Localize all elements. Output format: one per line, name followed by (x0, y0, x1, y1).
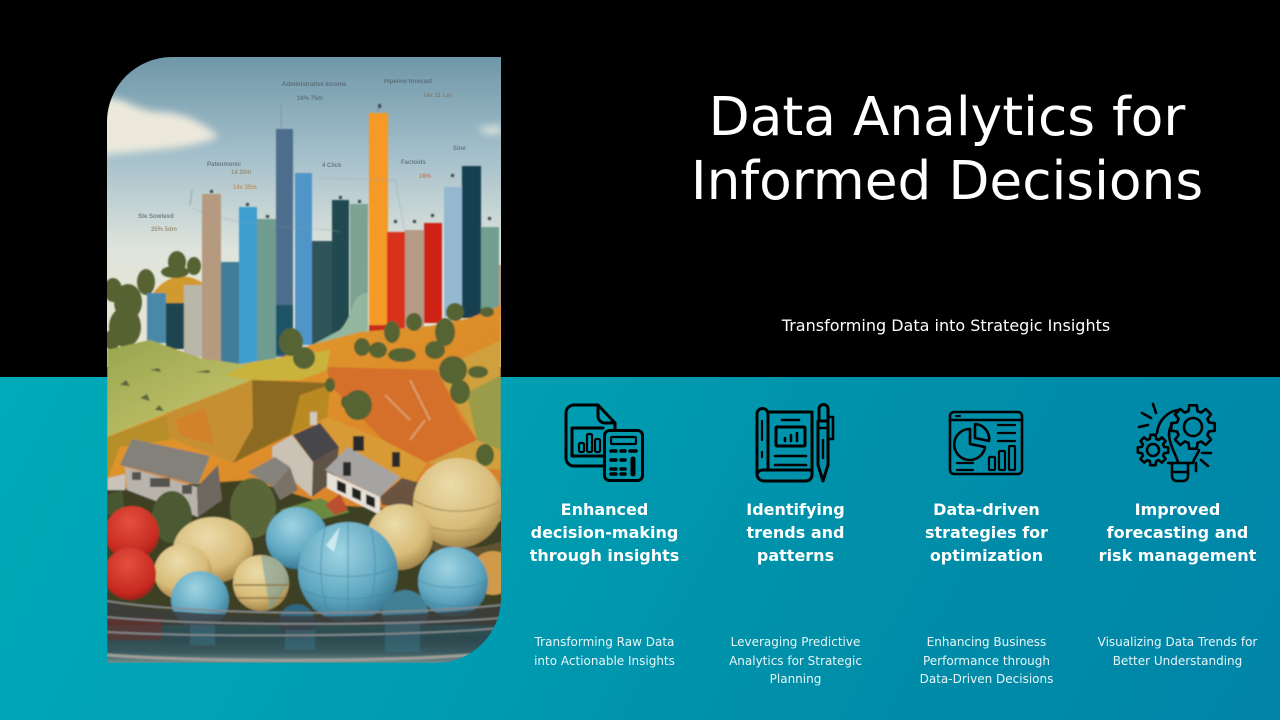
heading: forecasting and risk: risk management (1099, 546, 1256, 565)
description: business performance: Enhancing Business (927, 635, 1046, 649)
title (691, 85, 1203, 212)
description: predictive analytics: Analytics for Strategic (729, 654, 862, 668)
description: business performance (920, 635, 1053, 686)
heading: enhanced decision-making: decision-making (531, 523, 678, 542)
subtitle: Transforming Data into Strategic Insights (782, 316, 1110, 335)
chart labels inside the photo: Sine (453, 146, 466, 152)
house 2 (272, 435, 313, 497)
heading: forecasting and risk (1099, 500, 1256, 565)
house 3 (327, 472, 380, 515)
chart labels inside the photo: Pipeline forecast (384, 79, 432, 85)
foreground trees (279, 303, 494, 466)
title: Data Analytics for (709, 85, 1185, 148)
column 3: data-driven strategies (920, 410, 1053, 686)
chart labels inside the photo: 4 Click (322, 163, 342, 169)
heading: forecasting and risk: forecasting and (1107, 523, 1248, 542)
heading: data-driven strategies: Data-driven (933, 500, 1040, 519)
column 1: enhanced decision-making (530, 404, 679, 668)
description: business performance: Performance through (923, 654, 1050, 668)
spheres (413, 458, 503, 548)
heading: data-driven strategies (925, 500, 1048, 565)
chart labels inside the photo: 14x 35m (233, 185, 257, 191)
icon: document and calculator (564, 404, 644, 482)
title: Informed Decisions (691, 149, 1203, 212)
description: raw data to insights: into Actionable Insights (534, 654, 675, 668)
chart labels inside the photo: Patenmonic (207, 162, 242, 168)
chart labels inside the photo: Ste Sowtexd (138, 214, 174, 220)
description: raw data to insights: Transforming Raw Data (535, 635, 674, 649)
photo illustration: 3D bar chart landscape (107, 57, 501, 663)
description: visualizing trends (1098, 635, 1258, 668)
heading: data-driven strategies: strategies for (925, 523, 1048, 542)
chart labels inside the photo: 16% (419, 174, 432, 180)
chart labels inside the photo: Factoids (401, 160, 426, 166)
far hills and trees (152, 276, 203, 304)
heading: enhanced decision-making (530, 500, 679, 565)
icon: report book and pen (756, 403, 834, 482)
chart labels inside the photo: 14x 11 Lm (423, 93, 452, 99)
chart labels inside the photo: 14 20m (231, 170, 251, 176)
house 1 (125, 467, 198, 517)
heading: identifying trends: Identifying (746, 500, 845, 519)
description: visualizing trends: Visualizing Data Trends for (1098, 635, 1257, 649)
rolling hills (107, 305, 501, 530)
description: predictive analytics: Planning (770, 672, 821, 686)
heading: identifying trends (746, 500, 845, 565)
heading: identifying trends: trends and (747, 523, 844, 542)
description: predictive analytics: Leveraging Predictive (731, 635, 860, 649)
heading: enhanced decision-making: Enhanced (561, 500, 648, 519)
description: predictive analytics (729, 635, 862, 686)
column 2: identifying trends (729, 403, 862, 686)
heading: identifying trends: patterns (757, 546, 834, 565)
reflective base (107, 603, 510, 663)
bars (147, 293, 166, 343)
bushes (152, 491, 192, 543)
bar caps (210, 104, 491, 223)
heading: enhanced decision-making: through insights (530, 546, 679, 565)
description: visualizing trends: Better Understanding (1113, 654, 1242, 668)
icon: light bulb with gears (1136, 402, 1216, 482)
ground and shadow behind houses (107, 480, 510, 625)
description: business performance: Data-Driven Decisions (920, 672, 1053, 686)
chart labels inside the photo (138, 79, 466, 233)
heading: forecasting and risk: Improved (1135, 500, 1220, 519)
icon: dashboard window (948, 410, 1024, 476)
description: raw data to insights (534, 635, 675, 668)
chart labels inside the photo: 35% 5dm (151, 227, 177, 233)
column 4: forecasting and risk (1098, 402, 1258, 668)
teal lower band (0, 377, 1280, 720)
chart labels inside the photo: Administrative Income (282, 82, 347, 88)
chart labels inside the photo: 16% 75m (297, 96, 323, 102)
heading: data-driven strategies: optimization (930, 546, 1043, 565)
